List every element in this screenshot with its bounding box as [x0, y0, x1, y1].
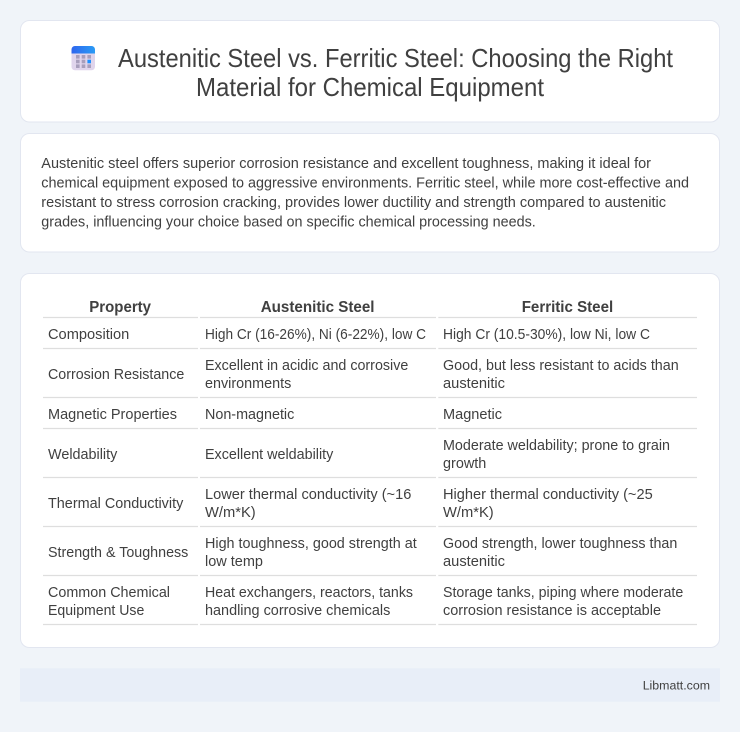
table row: weldability: Excellent weldability: [205, 447, 334, 463]
icon: calendar: [72, 46, 95, 70]
table row: weldability: [43, 438, 697, 478]
table row: composition: High Cr (10.5-30%), low Ni, low C: [443, 327, 650, 343]
table row: strength and toughness: Good strength, lower toughness than: [443, 536, 677, 552]
panel: comparison table: [20, 274, 720, 648]
table row: thermal conductivity: [43, 487, 697, 526]
table row: composition: High Cr (16-26%), Ni (6-22%), low C: [205, 327, 426, 343]
table row: thermal conductivity: Higher thermal conductivity (~25: [443, 487, 653, 503]
text block: introduction: chemical equipment exposed to aggressive environments. Ferritic steel, while more cost-effective and: [41, 176, 689, 192]
table row: strength and toughness: austenitic: [443, 554, 505, 570]
table row: common chemical equipment use: [43, 585, 697, 624]
footer: Libmatt.com: [643, 678, 710, 692]
table row: strength and toughness: [43, 536, 697, 576]
table header row: [43, 299, 697, 318]
table row: common chemical equipment use: handling corrosive chemicals: [205, 603, 390, 619]
table row: thermal conductivity: W/m*K): [205, 505, 256, 521]
table row: thermal conductivity: W/m*K): [443, 505, 494, 521]
table row: composition: Composition: [48, 327, 129, 343]
table row: corrosion resistance: environments: [205, 376, 291, 392]
table row: strength and toughness: low temp: [205, 554, 263, 570]
panel: introduction paragraph: [20, 134, 720, 252]
table row: thermal conductivity: Thermal Conductivity: [48, 496, 184, 512]
table row: common chemical equipment use: Common Chemical: [48, 585, 170, 601]
title: [118, 45, 673, 102]
footer: [20, 668, 720, 702]
table row: common chemical equipment use: Storage tanks, piping where moderate: [443, 585, 683, 601]
text block: introduction: resistant to stress corrosion cracking, provides lower ductility and strength compared to austenitic: [41, 195, 666, 211]
table row: corrosion resistance: austenitic: [443, 376, 505, 392]
table row: strength and toughness: Strength & Toughness: [48, 545, 188, 561]
table header row: Property: [89, 299, 151, 316]
table row: composition: [43, 327, 697, 348]
table row: thermal conductivity: Lower thermal conductivity (~16: [205, 487, 411, 503]
panel: title header: [20, 20, 720, 122]
table row: magnetic properties: Magnetic Properties: [48, 407, 177, 423]
table row: common chemical equipment use: Heat exchangers, reactors, tanks: [205, 585, 413, 601]
table row: corrosion resistance: [43, 358, 697, 398]
table row: strength and toughness: High toughness, good strength at: [205, 536, 417, 552]
title: Austenitic Steel vs. Ferritic Steel: Choosing the Right: [118, 45, 673, 73]
table row: weldability: Moderate weldability; prone to grain: [443, 438, 670, 454]
table row: common chemical equipment use: corrosion resistance is acceptable: [443, 603, 661, 619]
table row: magnetic properties: [43, 407, 697, 428]
table row: weldability: growth: [443, 456, 486, 472]
table row: corrosion resistance: Good, but less resistant to acids than: [443, 358, 679, 374]
text block: introduction: grades, influencing your choice based on specific chemical processing needs.: [41, 214, 536, 230]
table header row: Austenitic Steel: [261, 299, 374, 316]
table row: common chemical equipment use: Equipment Use: [48, 603, 144, 619]
text block: introduction: Austenitic steel offers superior corrosion resistance and excellent toughness, making it ideal for: [41, 156, 651, 172]
table row: corrosion resistance: Excellent in acidic and corrosive: [205, 358, 408, 374]
text block: introduction: [41, 156, 689, 230]
title: Material for Chemical Equipment: [196, 74, 544, 102]
table row: magnetic properties: Non-magnetic: [205, 407, 294, 423]
table row: corrosion resistance: Corrosion Resistance: [48, 367, 184, 383]
table row: magnetic properties: Magnetic: [443, 407, 502, 423]
table row: weldability: Weldability: [48, 447, 118, 463]
table header row: Ferritic Steel: [522, 299, 613, 316]
